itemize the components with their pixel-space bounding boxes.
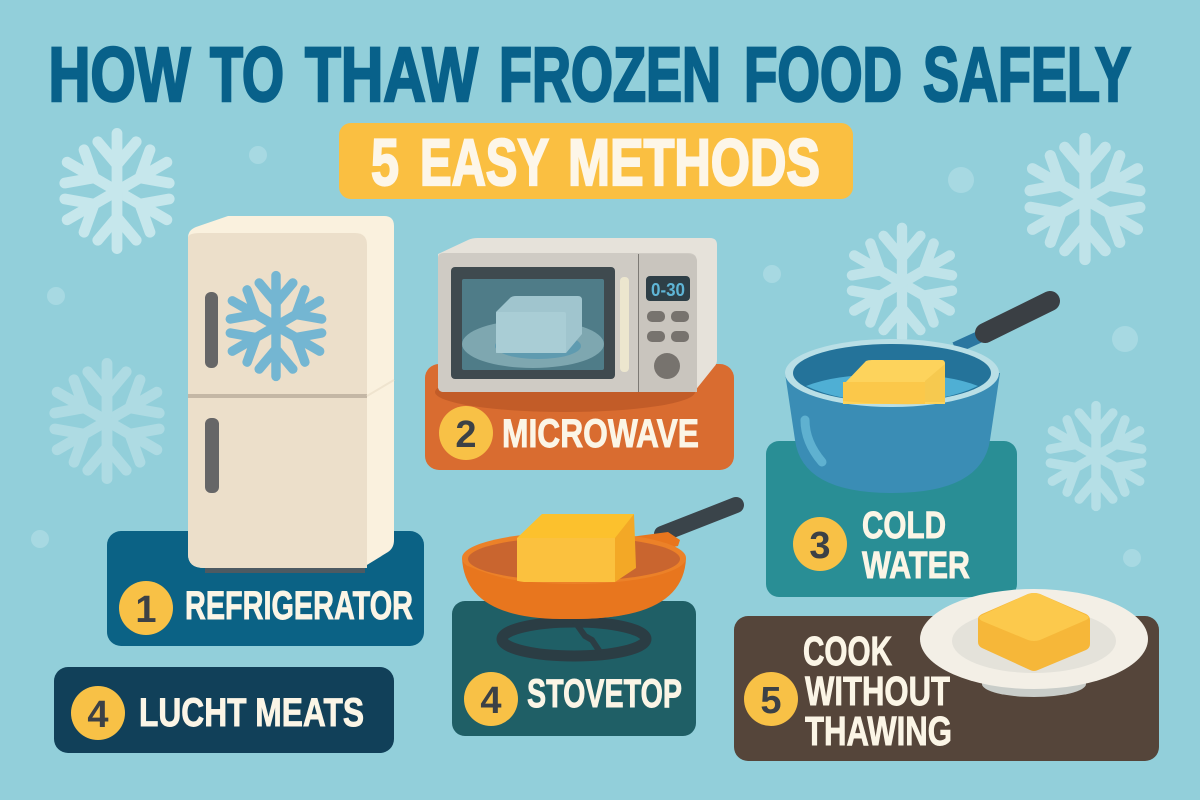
panel: cook without thawing: COOK — [803, 628, 892, 674]
subtitle pill: METHODS — [568, 125, 820, 199]
panel: cold water: 3 — [809, 525, 831, 567]
panel: cold water — [766, 301, 1050, 597]
panel: cook without thawing — [734, 589, 1159, 761]
title: TO — [210, 32, 284, 118]
title: FOOD — [744, 32, 902, 118]
panel: microwave: 0-30 — [651, 280, 685, 300]
panel: stovetop: STOVETOP — [527, 672, 682, 716]
panel: stovetop: 4 — [480, 680, 502, 722]
title — [48, 32, 1131, 118]
panel: microwave: MICROWAVE — [502, 412, 699, 456]
panel: cook without thawing: 5 — [760, 680, 782, 722]
panel: refrigerator — [107, 216, 424, 646]
subtitle pill: EASY — [420, 125, 549, 199]
panel: cook without thawing: THAWING — [805, 708, 952, 754]
panel: cold water: COLD — [862, 505, 946, 547]
subtitle pill: 5 — [371, 125, 399, 199]
panel: microwave — [425, 238, 734, 470]
panel: lucht meats: 4 — [87, 694, 109, 736]
panel: lucht meats — [54, 667, 394, 753]
title: THAW — [305, 32, 478, 118]
title: FROZEN — [499, 32, 721, 118]
panel: lucht meats: LUCHT MEATS — [139, 691, 364, 735]
panel: stovetop — [452, 505, 736, 736]
panel: refrigerator: REFRIGERATOR — [185, 584, 413, 628]
title: HOW — [48, 32, 191, 118]
panel: refrigerator: 1 — [135, 589, 157, 631]
panel: cook without thawing: WITHOUT — [805, 668, 950, 714]
background snowflakes and dots — [31, 133, 1148, 567]
panel: cold water: WATER — [862, 545, 970, 587]
subtitle pill — [339, 123, 853, 199]
panel: microwave: 2 — [455, 414, 477, 456]
